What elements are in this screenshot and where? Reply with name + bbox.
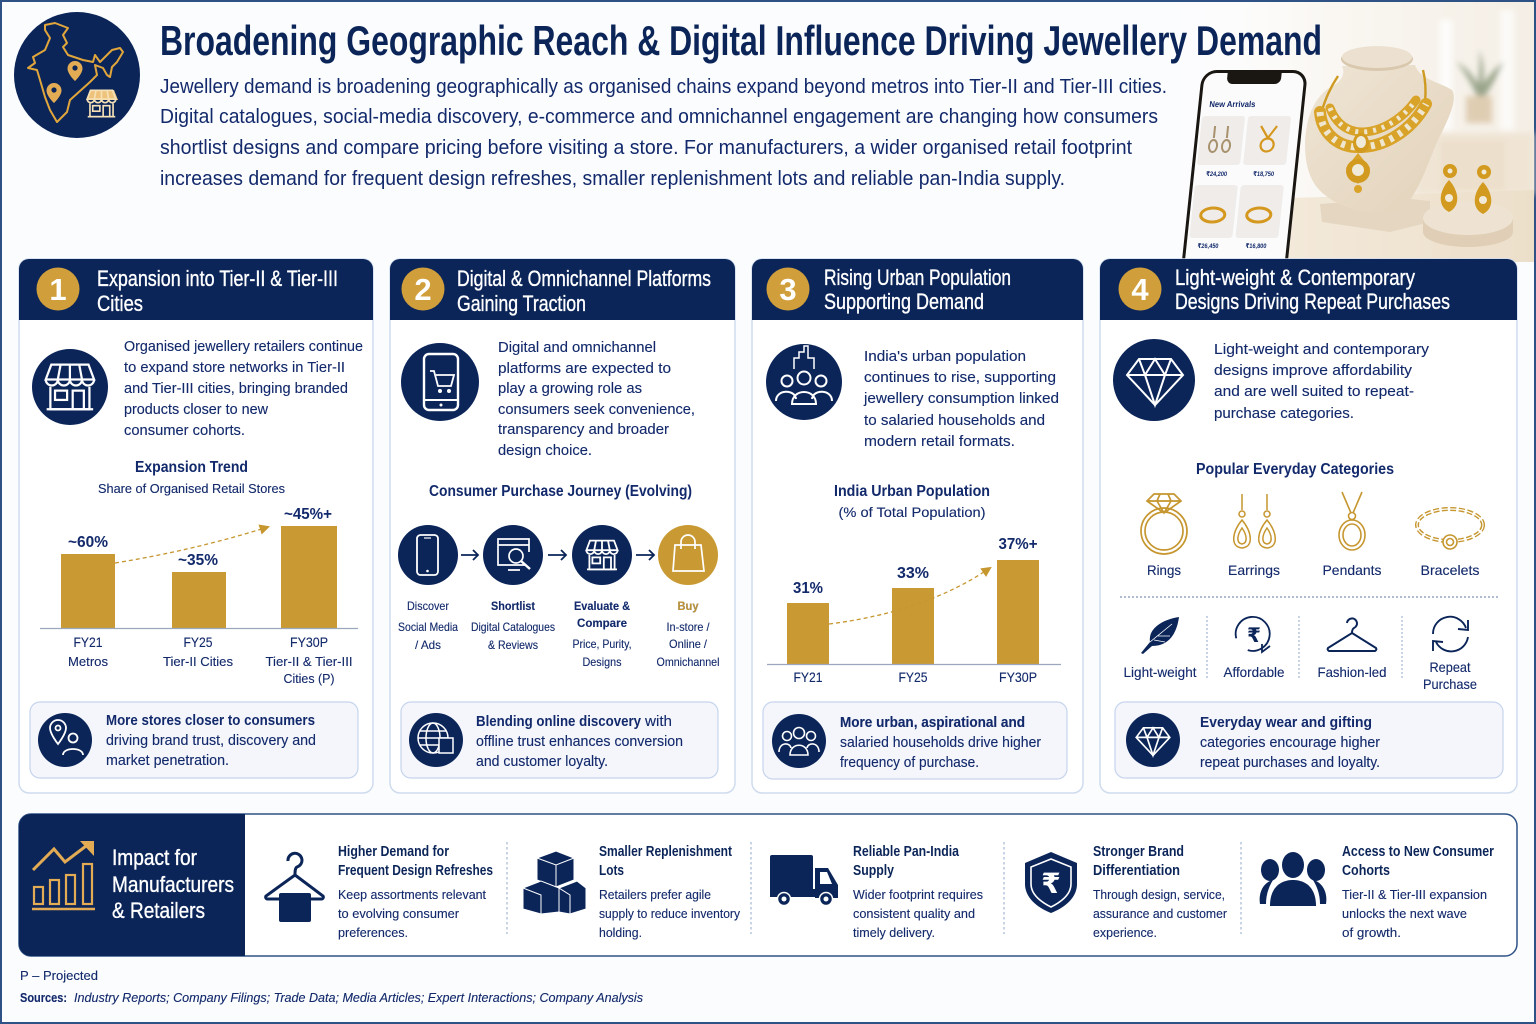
- impact: replenishment lots: [523, 844, 740, 940]
- impact label block: & Retailers: [112, 898, 205, 923]
- heading: consumer purchase journey: Consumer Purchase Journey (Evolving): [429, 483, 692, 500]
- hero photo: phone and jewellery display: [1182, 2, 1536, 262]
- impact: design refreshes: preferences.: [338, 925, 408, 940]
- panel 3 description: India's urban population: [864, 348, 1026, 365]
- category: pendants: Pendants: [1322, 562, 1382, 578]
- sources: Sources:: [20, 990, 67, 1005]
- panel 4 description: designs improve affordability: [1214, 362, 1413, 379]
- impact: replenishment lots: Retailers prefer agile: [599, 887, 711, 902]
- panel 2 description: transparency and broader: [498, 421, 669, 438]
- panel 3: rising urban population: [752, 259, 1083, 793]
- attribute: light-weight: Light-weight: [1124, 664, 1197, 680]
- arrow: [636, 550, 654, 560]
- step: evaluate and compare: [572, 525, 632, 669]
- step: discover: / Ads: [415, 638, 441, 652]
- icon: city and people: [766, 344, 842, 420]
- icon: rupee shield: [1025, 852, 1077, 913]
- chart heading: expansion trend: [98, 459, 285, 496]
- callout: everyday wear and gifting: [1115, 702, 1503, 778]
- step: shortlist: Shortlist: [491, 599, 535, 613]
- attribute: repeat purchase: Repeat: [1430, 659, 1471, 675]
- impact: brand differentiation: assurance and customer: [1093, 906, 1228, 921]
- panel 3 description: continues to rise, supporting: [864, 369, 1056, 386]
- panel 2 header: [390, 259, 735, 320]
- category: bracelets: Bracelets: [1420, 562, 1480, 578]
- panel 1 description: [124, 338, 363, 439]
- callout: more stores closer to consumers: More stores closer to consumers: [106, 713, 315, 729]
- header icon: India map with pins and store: [14, 12, 140, 138]
- bar chart: urban population share: 33%: [897, 565, 929, 582]
- panel 4 description: Light-weight and contemporary: [1214, 341, 1430, 358]
- category: earrings: [1228, 494, 1280, 578]
- bar chart: share of organised retail stores: Tier-II Cities: [163, 654, 234, 669]
- step: discover: Social Media: [398, 620, 458, 634]
- intro paragraph: [160, 75, 1167, 190]
- bar chart: urban population share: 37%+: [998, 536, 1038, 553]
- attribute: affordable: Affordable: [1224, 664, 1285, 680]
- impact: new consumer cohorts: Access to New Consumer: [1342, 844, 1494, 860]
- panel 2: digital and omnichannel platforms: [390, 259, 735, 793]
- bar chart: share of organised retail stores: Tier-II & Tier-III: [266, 654, 352, 669]
- hero photo: phone and jewellery display: ₹18,750: [1253, 171, 1275, 178]
- panel 1 description: to expand store networks in Tier-II: [124, 359, 345, 376]
- panel 1 description: products closer to new: [124, 401, 268, 418]
- impact: pan-India supply: Wider footprint requires: [853, 887, 983, 902]
- panel 4: light-weight and contemporary designs: [1100, 259, 1517, 793]
- chart heading: India urban population: [834, 483, 990, 520]
- panel 1 description: and Tier-III cities, bringing branded: [124, 380, 348, 397]
- intro paragraph: increases demand for frequent design refreshes, smaller replenishment lots and reliable pan-India supply.: [160, 167, 1065, 190]
- step: discover: Discover: [407, 599, 449, 613]
- category: bracelets: [1417, 509, 1483, 578]
- icon: diamond: [1113, 339, 1195, 421]
- panel 4 header: [1100, 259, 1517, 320]
- category: rings: Rings: [1147, 562, 1181, 578]
- chart heading: India urban population: India Urban Population: [834, 483, 990, 500]
- impact: brand differentiation: [1025, 844, 1228, 940]
- callout: everyday wear and gifting: Everyday wear and gifting: [1200, 714, 1372, 731]
- bar chart: share of organised retail stores: ~60%: [68, 534, 108, 551]
- panel 1 description: consumer cohorts.: [124, 422, 245, 439]
- attribute: affordable: ₹: [1247, 625, 1261, 647]
- impact: replenishment lots: Smaller Replenishment: [599, 844, 732, 860]
- panel 3 description: jewellery consumption linked: [863, 390, 1059, 407]
- impact: brand differentiation: Stronger Brand: [1093, 844, 1184, 860]
- callout: everyday wear and gifting: categories encourage higher: [1200, 734, 1380, 751]
- impact: design refreshes: Keep assortments relevant: [338, 887, 486, 902]
- bar chart: share of organised retail stores: [40, 506, 358, 686]
- bar chart: urban population share: 31%: [793, 580, 823, 597]
- panel 3 header: Supporting Demand: [824, 289, 984, 314]
- icon: hanger with garment: [266, 853, 323, 922]
- panel 2 header: Gaining Traction: [457, 291, 586, 316]
- panel 4 description: [1214, 341, 1430, 422]
- callout: more urban households: frequency of purchase.: [840, 754, 979, 771]
- impact: design refreshes: Higher Demand for: [338, 844, 449, 860]
- panel: impact for manufacturers and retailers: [19, 814, 1517, 956]
- callout: blending online discovery: with: [644, 713, 672, 730]
- callout: blending online discovery: and customer loyalty.: [476, 753, 608, 770]
- step: evaluate and compare: Compare: [577, 616, 627, 630]
- panel 2 description: design choice.: [498, 442, 592, 459]
- callout: more urban households: [763, 702, 1067, 779]
- panel 4 header: Light-weight & Contemporary: [1175, 265, 1415, 290]
- impact: pan-India supply: Reliable Pan-India: [853, 844, 960, 860]
- step: buy: Omnichannel: [656, 655, 720, 669]
- step: evaluate and compare: Designs: [582, 655, 622, 669]
- attribute: fashion-led: Fashion-led: [1318, 664, 1386, 680]
- step: buy: Buy: [678, 599, 699, 613]
- impact: pan-India supply: timely delivery.: [853, 925, 935, 940]
- impact label block: [19, 814, 245, 956]
- panel 2 description: platforms are expected to: [498, 360, 671, 377]
- callout: blending online discovery: Blending online discovery: [476, 713, 642, 730]
- panel 1 header: [19, 259, 373, 320]
- panel 1 header: 1: [49, 272, 67, 307]
- icon: stacked boxes: [523, 851, 586, 914]
- impact: brand differentiation: Differentiation: [1093, 863, 1180, 879]
- panel 2 description: play a growing role as: [498, 380, 642, 397]
- panel 1: expansion into Tier-II and Tier-III cities: [19, 259, 373, 793]
- intro paragraph: Digital catalogues, social-media discovery, e-commerce and omnichannel engagement are changing how consumers: [160, 105, 1158, 128]
- panel 2 header: Digital & Omnichannel Platforms: [457, 266, 711, 291]
- impact: replenishment lots: Lots: [599, 863, 624, 879]
- bar chart: share of organised retail stores: FY21: [74, 634, 103, 650]
- impact: new consumer cohorts: Tier-II & Tier-III expansion: [1342, 887, 1487, 902]
- bar chart: share of organised retail stores: FY30P: [290, 634, 328, 650]
- impact: new consumer cohorts: of growth.: [1342, 925, 1401, 940]
- icon: store: [32, 349, 108, 425]
- callout: blending online discovery: [401, 702, 718, 778]
- callout: more stores closer to consumers: market penetration.: [106, 752, 229, 769]
- impact: new consumer cohorts: Cohorts: [1342, 863, 1390, 879]
- arrow: [461, 550, 478, 560]
- category: earrings: Earrings: [1228, 562, 1280, 578]
- hero photo: phone and jewellery display: ₹24,200: [1206, 171, 1228, 178]
- panel 3 description: [863, 348, 1059, 450]
- callout: blending online discovery: offline trust enhances conversion: [476, 733, 683, 750]
- bar chart: urban population share: FY21: [794, 669, 823, 685]
- impact: design refreshes: Frequent Design Refreshes: [338, 863, 493, 879]
- panel 4 description: and are well suited to repeat-: [1214, 383, 1414, 400]
- callout: more stores closer to consumers: [30, 702, 358, 778]
- impact: pan-India supply: [770, 844, 983, 940]
- attribute: repeat purchase: [1423, 617, 1477, 692]
- step: buy: Online /: [669, 637, 708, 651]
- step: buy: [656, 525, 720, 669]
- panel 3 header: [752, 259, 1083, 320]
- bar chart: share of organised retail stores: FY25: [184, 634, 213, 650]
- bar chart: share of organised retail stores: Metros: [68, 654, 108, 669]
- hero photo: phone and jewellery display: ₹16,800: [1245, 243, 1267, 250]
- attribute: affordable: [1224, 611, 1285, 680]
- bar chart: urban population share: FY30P: [999, 669, 1037, 685]
- panel 3 description: modern retail formats.: [864, 433, 1015, 450]
- bar chart: share of organised retail stores: ~45%+: [284, 506, 332, 523]
- hero photo: phone and jewellery display: New Arrivals: [1209, 99, 1256, 109]
- chart heading: India urban population: (% of Total Population): [838, 504, 986, 520]
- panel 3 header: Rising Urban Population: [824, 265, 1011, 290]
- intro paragraph: Jewellery demand is broadening geographically as organised chains expand beyond metros into Tier-II and Tier-III cities.: [160, 75, 1167, 98]
- impact: new consumer cohorts: [1260, 844, 1494, 940]
- panel 1 description: Organised jewellery retailers continue: [124, 338, 363, 355]
- impact: replenishment lots: holding.: [599, 925, 642, 940]
- panel 4 header: 4: [1131, 272, 1149, 307]
- sources: Industry Reports; Company Filings; Trade Data; Media Articles; Expert Interactions; Company Analysis: [74, 990, 643, 1005]
- arrow: [548, 550, 566, 560]
- step: buy: In-store /: [666, 620, 710, 634]
- step: shortlist: Digital Catalogues: [471, 620, 555, 634]
- panel 2 description: Digital and omnichannel: [498, 339, 656, 356]
- panel 1 header: Expansion into Tier-II & Tier-III: [97, 266, 338, 291]
- attribute: fashion-led: [1318, 618, 1386, 680]
- panel 3 header: 3: [779, 272, 797, 307]
- step: shortlist: [471, 525, 555, 652]
- step: evaluate and compare: Evaluate &: [574, 599, 630, 613]
- panel 2 description: consumers seek convenience,: [498, 401, 695, 418]
- step: discover: [398, 525, 458, 652]
- bar chart: urban population share: FY25: [898, 669, 928, 685]
- callout: more stores closer to consumers: driving brand trust, discovery and: [106, 732, 316, 749]
- bar chart: share of organised retail stores: Cities (P): [284, 671, 334, 686]
- icon: delivery truck: [770, 855, 838, 906]
- impact: new consumer cohorts: unlocks the next wave: [1342, 906, 1467, 921]
- callout: more urban households: salaried households drive higher: [840, 734, 1041, 751]
- icon: rupee shield: ₹: [1041, 868, 1061, 899]
- icon: people group: [1260, 852, 1326, 906]
- impact: pan-India supply: consistent quality and: [853, 906, 975, 921]
- callout: everyday wear and gifting: repeat purchases and loyalty.: [1200, 754, 1380, 771]
- step: evaluate and compare: Price, Purity,: [572, 637, 632, 651]
- impact: design refreshes: [266, 844, 493, 940]
- bar chart: share of organised retail stores: ~35%: [178, 552, 218, 569]
- impact: pan-India supply: Supply: [853, 863, 894, 879]
- panel 2 description: [498, 339, 695, 459]
- panel 2 header: 2: [414, 272, 432, 307]
- intro paragraph: shortlist designs and compare pricing before visiting a store. For manufacturers, a wider organised retail footprint: [160, 136, 1132, 159]
- callout: more urban households: More urban, aspirational and: [840, 715, 1025, 731]
- icon: phone with cart: [401, 343, 479, 421]
- panel 1 header: Cities: [97, 291, 143, 316]
- impact label block: Impact for: [112, 845, 197, 870]
- category: rings: [1141, 494, 1187, 578]
- hero photo: phone and jewellery display: ₹26,450: [1197, 243, 1219, 250]
- impact label block: Manufacturers: [112, 872, 234, 897]
- footnote: projected: P – Projected: [20, 968, 98, 983]
- panel 4 description: purchase categories.: [1214, 405, 1354, 422]
- bar chart: urban population share: [767, 536, 1061, 685]
- chart heading: expansion trend: Expansion Trend: [135, 459, 248, 476]
- panel 4 header: Designs Driving Repeat Purchases: [1175, 289, 1450, 314]
- category: pendants: [1322, 492, 1382, 578]
- chart heading: expansion trend: Share of Organised Retail Stores: [98, 481, 285, 496]
- flow: purchase journey steps: [398, 525, 720, 669]
- impact: design refreshes: to evolving consumer: [338, 906, 460, 921]
- panel 3 description: to salaried households and: [864, 412, 1045, 429]
- heading: popular everyday categories: Popular Everyday Categories: [1196, 461, 1394, 478]
- impact: brand differentiation: Through design, service,: [1093, 887, 1225, 902]
- step: shortlist: & Reviews: [488, 638, 538, 652]
- impact: replenishment lots: supply to reduce inventory: [599, 906, 740, 921]
- attribute: light-weight: [1124, 617, 1197, 680]
- impact: brand differentiation: experience.: [1093, 925, 1157, 940]
- attribute: repeat purchase: Purchase: [1423, 676, 1477, 692]
